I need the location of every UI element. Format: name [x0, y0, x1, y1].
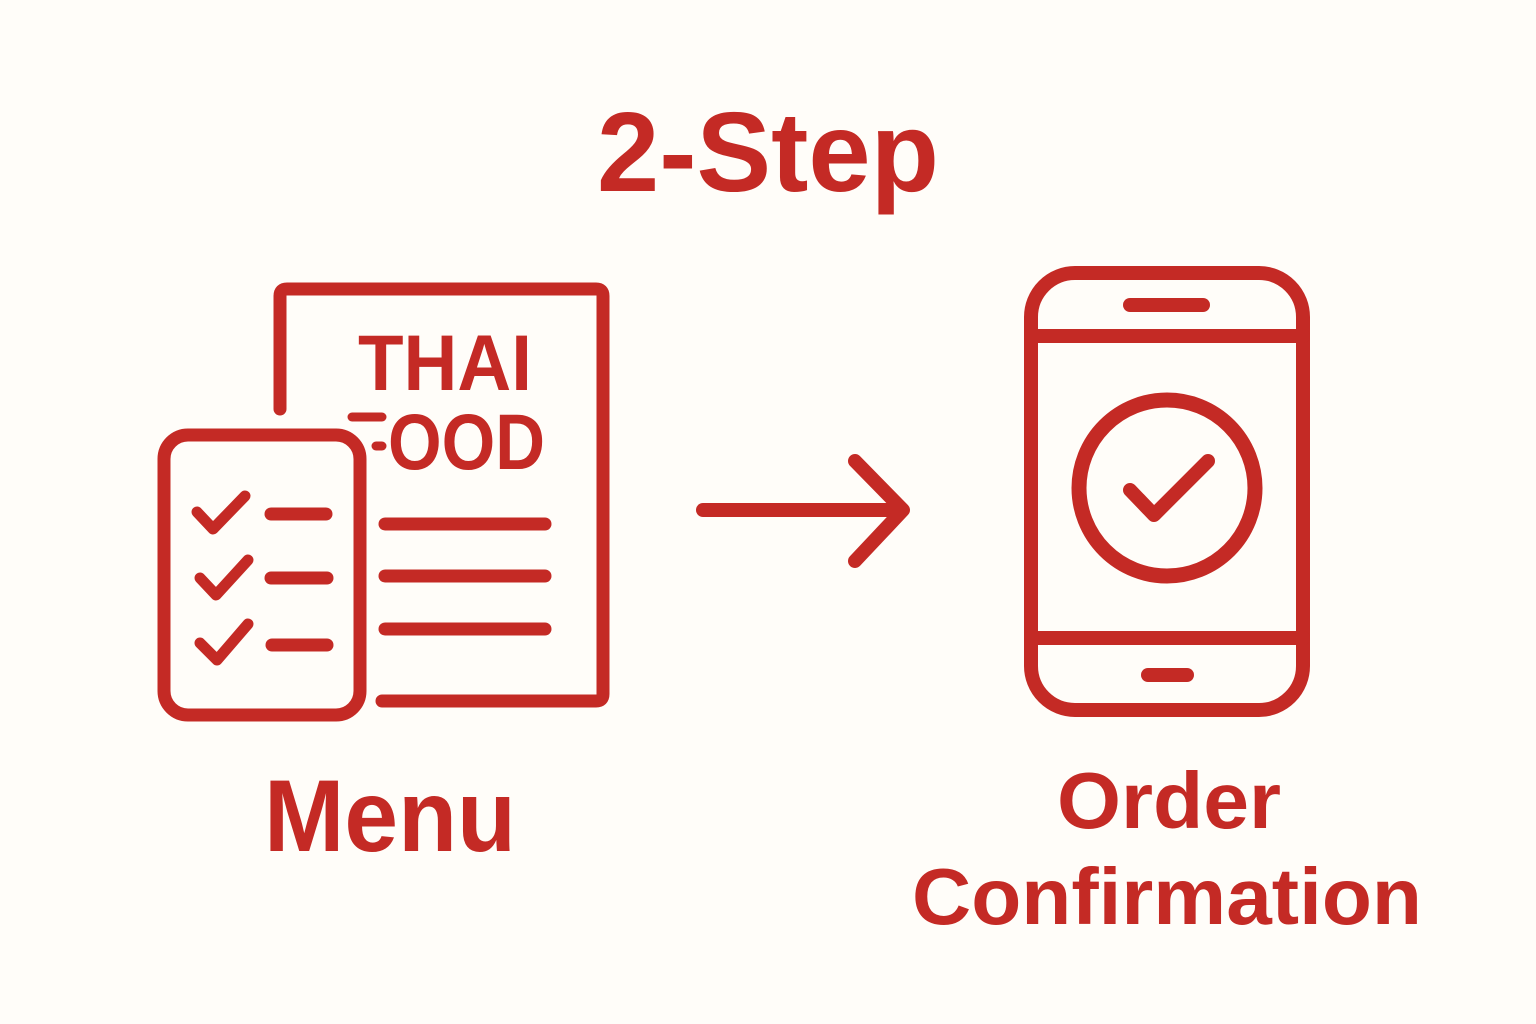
- checklist card: [164, 435, 360, 715]
- menu text lines: [385, 524, 545, 629]
- label: Order Confirmation: Confirmation: [912, 852, 1422, 941]
- home button: [1148, 668, 1187, 682]
- icon: menu document with checklist: [164, 289, 603, 715]
- menu sheet outline: [280, 289, 603, 701]
- label: Order Confirmation: Order: [1057, 756, 1281, 845]
- icon: phone with confirmation check: [1031, 273, 1303, 710]
- label: Order Confirmation: [912, 756, 1422, 941]
- speaker: [1130, 298, 1203, 312]
- label: Menu: Menu: [264, 759, 516, 873]
- menu heading: THAI FOOD: [352, 318, 545, 486]
- menu heading: THAI FOOD: THAI: [358, 318, 532, 407]
- check mark: [1130, 461, 1208, 515]
- checklist items: [197, 496, 327, 660]
- title: 2-Step: [597, 89, 939, 215]
- phone body: [1031, 273, 1303, 710]
- screen top divider: [1031, 329, 1303, 343]
- check circle: [1079, 400, 1255, 576]
- screen bottom divider: [1031, 631, 1303, 645]
- menu heading: THAI FOOD: OOD: [388, 397, 545, 486]
- arrow: [703, 461, 903, 561]
